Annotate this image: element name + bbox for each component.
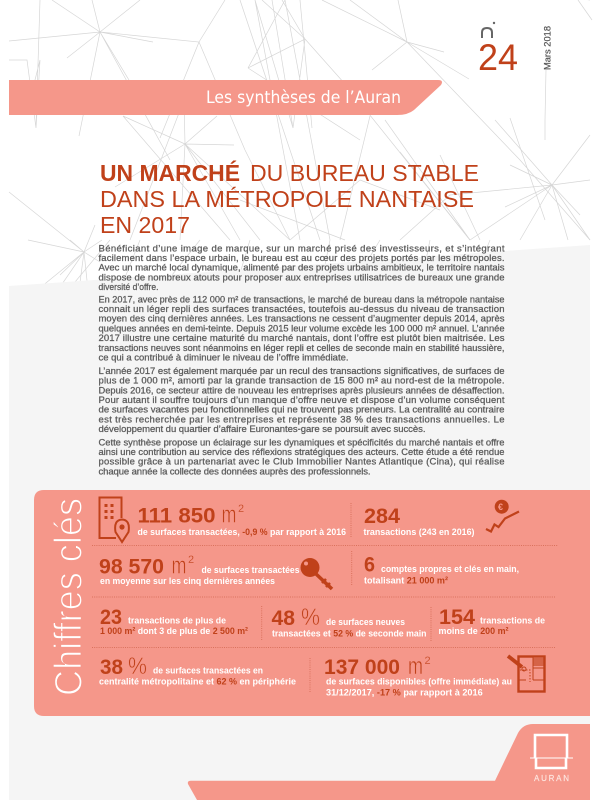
stat: 6 comptes propres: 6 — [364, 553, 375, 577]
header band — [9, 80, 442, 115]
intro paragraph 4: ainsi une contribution au service des réflexions stratégiques des acteurs. Cette étude a été rendue — [98, 447, 504, 458]
stat: 38 %: 38 — [100, 655, 123, 679]
stat: 98 570 m² — [99, 552, 300, 586]
stat: 98 570 m²: 2 — [188, 554, 194, 566]
stat: 98 570 m²: de surfaces transactées — [202, 564, 300, 575]
issue number: 24 — [478, 37, 518, 78]
main title — [100, 159, 479, 238]
intro paragraph 2: connait un léger repli des surfaces transactées, toutefois au-dessus du niveau de transaction — [98, 304, 504, 315]
stat: 137 000 m² — [324, 653, 512, 698]
logo: Auran — [530, 735, 573, 783]
main title: UN MARCHÉ — [100, 159, 240, 186]
stat: 154 transactions: moins de 200 m² — [438, 625, 508, 636]
stat: 38 % — [99, 653, 296, 686]
intro paragraph 3: de surfaces vacantes peu fonctionnelles qui ne trouvent pas preneurs. La centralité au contraire — [98, 405, 504, 416]
stat: 111 850 m²: m — [222, 501, 236, 528]
stat: 48 %: de surfaces neuves — [326, 616, 405, 627]
stat: 23 transactions: transactions de plus de — [128, 614, 226, 625]
intro paragraph 1: Bénéficiant d’une image de marque, sur un marché prisé des investisseurs, et s’intégrant — [98, 243, 505, 254]
logo: Auran: AURAN — [534, 774, 569, 783]
intro paragraph 1: dispose de nombreux atouts pour proposer aux entreprises utilisatrices de bureaux une grande — [98, 272, 504, 283]
intro paragraph 3: est très recherchée par les entreprises et représente 38 % des transactions annuelles. Le — [98, 414, 504, 425]
panel: chiffres clés — [34, 490, 590, 716]
stat: 137 000 m²: 137 000 — [324, 655, 400, 679]
stat: 38 %: centralité métropolitaine et 62 % en périphérie — [99, 675, 296, 686]
intro paragraph 4: chaque année la collecte des données auprès des professionnels. — [98, 466, 370, 477]
stat: 23 transactions — [100, 605, 248, 636]
icon: building with pin — [100, 498, 129, 542]
intro paragraph 3: Pour autant il souffre toujours d’un manque d’offre neuve et dispose d’un volume conséquent — [98, 395, 505, 406]
intro paragraph 2 — [98, 294, 505, 364]
icon: floor plan with roller — [508, 656, 544, 692]
stat: 137 000 m²: m — [408, 653, 423, 680]
main title: EN 2017 — [100, 212, 190, 238]
stat: 38 %: de surfaces transactées en — [153, 664, 263, 675]
footer band — [188, 724, 590, 800]
stat: 111 850 m²: de surfaces transactées, -0,9 % par rapport à 2016 — [138, 526, 346, 537]
intro paragraph 2: quelques années en demi-teinte. Depuis 2015 leur volume excède les 100 000 m² annuel. L’année — [98, 323, 504, 334]
stat: 154 transactions: 154 — [439, 605, 475, 629]
intro paragraph 1 — [98, 243, 505, 293]
stat: 23 transactions: 1 000 m² dont 3 de plus de 2 500 m² — [100, 625, 248, 636]
background panel: light grey page — [9, 245, 590, 800]
intro paragraph 2: 2017 illustre une certaine maturité du marché nantais, dont l’offre est plutôt bien maitrisée. Les — [98, 333, 505, 344]
stat: 137 000 m²: de surfaces disponibles (offre immédiate) au — [326, 675, 512, 686]
stat: 48 %: transactées et 52 % de seconde main — [272, 628, 427, 639]
stat: 48 %: % — [301, 604, 320, 631]
stat: 154 transactions: transactions de — [480, 614, 545, 625]
stat: 48 %: 48 — [272, 606, 295, 630]
stat: 284 transactions — [364, 504, 474, 537]
intro paragraph 4: Cette synthèse propose un éclairage sur les dynamiques et spécificités du marché nantais et offre — [98, 437, 504, 448]
stat: 98 570 m²: en moyenne sur les cinq dernières années — [100, 575, 275, 586]
stat: 98 570 m²: 98 570 — [99, 554, 164, 578]
main title: DU BUREAU STABLE — [250, 160, 479, 186]
intro paragraph 1: facilement dans l’espace urbain, le bureau est au cœur des projets portés par les métropoles. — [98, 253, 504, 264]
icon: euro rising chart — [486, 500, 519, 532]
stat: 98 570 m²: m — [172, 552, 186, 579]
intro paragraph 4: possible grâce à un partenariat avec le Club Immobilier Nantes Atlantique (Cina), qui réalise — [98, 457, 504, 468]
main title: DANS LA MÉTROPOLE NANTAISE — [100, 186, 474, 212]
intro paragraph 3 — [98, 366, 505, 435]
date: Mars 2018 — [542, 26, 554, 70]
intro paragraph 2: moyen des cinq dernières années. Les transactions ne cessent d’augmenter depuis 2014, après — [98, 314, 505, 325]
intro paragraph 3: Depuis 2016, ce secteur attire de nouveau les entreprises après plusieurs années de désaffection. — [98, 385, 504, 396]
panel heading: Chiffres clés — [48, 498, 90, 696]
stat: 111 850 m² — [138, 501, 346, 537]
stat: 111 850 m²: 111 850 — [138, 503, 216, 527]
intro paragraph 4 — [98, 437, 504, 477]
stat: 284 transactions: 284 — [364, 504, 400, 528]
stat: 284 transactions: transactions (243 en 2016) — [364, 526, 474, 537]
stat: 137 000 m²: 31/12/2017, -17 % par rapport à 2016 — [326, 687, 483, 698]
intro paragraph 1: diversité d’offre. — [98, 282, 158, 293]
intro paragraph 3: développement du quartier d’affaire Euronantes-gare se poursuit avec succès. — [98, 424, 426, 435]
intro paragraph 2: transactions neuves sont néanmoins en léger repli et celles de seconde main en stabilité haussière, — [98, 343, 504, 354]
stat: 137 000 m²: 2 — [424, 655, 431, 667]
stat: 38 %: % — [128, 653, 147, 680]
intro paragraph 2: ce qui a contribué à diminuer le niveau de l’offre immédiate. — [98, 353, 348, 364]
stat: 154 transactions — [438, 605, 545, 636]
icon: euro rising chart: € — [498, 502, 503, 512]
intro paragraph 2: En 2017, avec près de 112 000 m² de transactions, le marché de bureau dans la métropole nantaise — [98, 294, 504, 305]
stat: 6 comptes propres: comptes propres et clés en main, — [381, 563, 519, 574]
intro paragraph 3: L’année 2017 est également marquée par un recul des transactions significatives, de surfaces de — [98, 366, 504, 377]
icon: key — [300, 558, 332, 589]
intro paragraph 3: plus de 1 000 m², amorti par la grande transaction de 15 800 m² au nord-est de la métropole. — [98, 376, 504, 387]
intro paragraph 1: Avec un marché local dynamique, alimenté par des projets urbains ambitieux, le territoire nantais — [98, 263, 505, 274]
stat: 111 850 m²: 2 — [238, 503, 244, 515]
stat: 48 % — [272, 604, 427, 639]
stat: 6 comptes propres — [364, 553, 519, 585]
stat: 23 transactions: 23 — [100, 605, 122, 629]
band title: Les synthèses de l’Auran — [206, 88, 401, 107]
stat: 6 comptes propres: totalisant 21 000 m² — [364, 574, 448, 585]
